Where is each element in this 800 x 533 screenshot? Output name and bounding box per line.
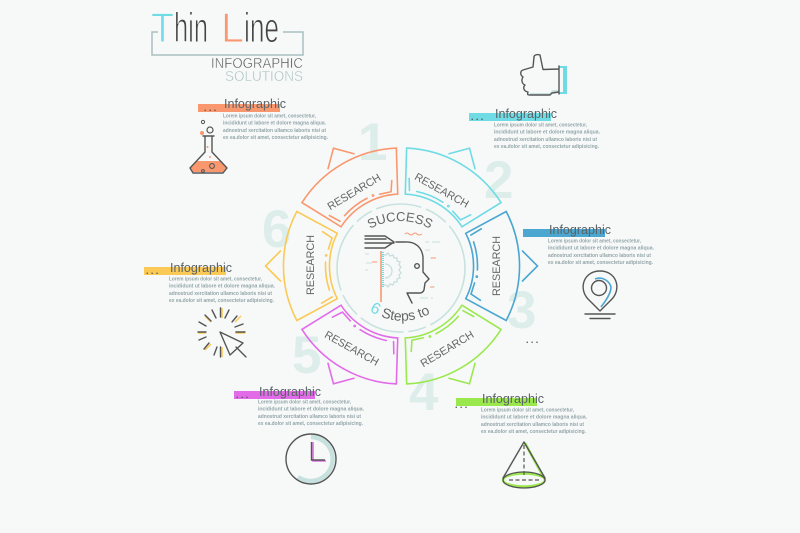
step numbers: 6 [262,200,291,259]
subtitle: Infographic Solutions: SOLUTIONS [225,68,303,85]
block 1: orange: ex ea.dolor sit amet, consectetur adipisicing. [223,135,329,141]
block 2: cyan: Infographic [495,107,557,121]
block 5: magenta: ... [236,390,251,400]
subtitle: Infographic Solutions [211,55,303,85]
block 6: yellow: ex ea.dolor sit amet, consectetur adipisicing. [169,298,275,304]
block 2: cyan: ... [471,112,486,122]
icon: map pin [583,271,617,318]
icon: flask [190,120,227,173]
title: Thin Line logo: hin [174,4,208,51]
block 6: yellow: ... [146,266,161,276]
block 6: yellow: Infographic [170,261,232,275]
block 4: green: adnostrud xercitation ullamco laboris nisi ut [481,422,584,428]
step numbers [262,113,536,422]
block 2: cyan: adnostrud xercitation ullamco laboris nisi ut [494,137,597,143]
segment 1: orange [286,121,417,238]
title: Thin Line logo: T [151,4,174,51]
block 4: green: ... [455,400,470,410]
segment 6: yellow [266,212,337,320]
block 2: cyan: incididunt ut labore et dolore magna aliqua. [494,130,601,136]
step numbers: 4 [409,363,439,422]
block 3: blue: adnostrud xercitation ullamco laboris nisi ut [548,253,651,259]
centre caption: 6 Steps to: 6 Steps to [371,302,429,324]
step numbers: 2 [484,151,513,210]
block 1: orange [198,97,329,141]
segment labels: RESEARCH: RESEARCH [419,329,476,370]
block 5: magenta: adnostrud xercitation ullamco laboris nisi ut [258,414,361,420]
block 2: cyan: ex ea.dolor sit amet, consectetur adipisicing. [494,144,600,150]
centre ring [337,204,465,332]
icon: cursor click [198,308,246,357]
block 4: green: ex ea.dolor sit amet, consectetur adipisicing. [481,429,587,435]
centre heading: SUCCESS [368,212,432,228]
block 2: cyan [469,107,601,150]
block 6: yellow: Lorem ipsum dolor sit amet, consectetur, [169,276,263,282]
block 3: blue: ... [526,335,541,345]
title: Thin Line logo: ine [244,4,279,51]
block 1: orange: Lorem ipsum dolor sit amet, consectetur, [223,114,317,120]
block 5: magenta: Lorem ipsum dolor sit amet, consectetur, [258,400,352,406]
segment labels: RESEARCH [305,171,503,370]
block 4: green: incididunt ut labore et dolore magna aliqua. [481,415,588,421]
step numbers: 3 [507,281,536,340]
block 6: yellow: incididunt ut labore et dolore magna aliqua. [169,284,276,290]
block 5: magenta: Infographic [259,385,321,399]
block 4: green [455,392,588,435]
icon: cone [503,442,545,488]
block 3: blue: Infographic [549,223,611,237]
segment 2: cyan [386,121,517,238]
block 4: green: Infographic [482,392,544,406]
block 6: yellow [144,261,276,304]
subtitle: Infographic Solutions: INFOGRAPHIC [211,55,303,72]
block 3: blue: Lorem ipsum dolor sit amet, consectetur, [548,238,642,244]
segment labels: RESEARCH: RESEARCH [305,235,317,295]
icon: head with pencil and gear [365,233,440,303]
step numbers: 1 [358,113,387,172]
block 5: magenta [234,385,365,427]
block 5: magenta: incididunt ut labore et dolore magna aliqua. [258,407,365,413]
title: Thin Line logo: L [221,4,244,51]
segment labels: RESEARCH: RESEARCH [412,171,471,211]
centre heading: SUCCESS: SUCCESS [368,212,432,228]
block 4: green: Lorem ipsum dolor sit amet, consectetur, [481,408,575,414]
block 3: blue [523,223,655,345]
segment 4: green [386,294,517,411]
block 2: cyan: Lorem ipsum dolor sit amet, consectetur, [494,122,588,128]
block 1: orange: Infographic [224,97,286,111]
segment 3: blue [466,212,538,320]
block 1: orange: adnostrud xercitation ullamco laboris nisi ut [223,128,326,134]
segment labels: RESEARCH: RESEARCH [326,172,383,213]
block 3: blue: ex ea.dolor sit amet, consectetur adipisicing. [548,260,654,266]
block 6: yellow: adnostrud xercitation ullamco laboris nisi ut [169,291,272,297]
title: Thin Line logo [151,4,303,55]
block 3: blue: incididunt ut labore et dolore magna aliqua. [548,246,655,252]
block 1: orange: incididunt ut labore et dolore magna aliqua. [223,121,327,127]
segment labels: RESEARCH: RESEARCH [322,329,381,369]
block 1: orange: ... [204,103,219,113]
icon: thumbs up [521,55,567,95]
block 5: magenta: ex ea.dolor sit amet, consectetur adipisicing. [258,421,364,427]
segment 5: magenta [286,294,417,411]
icon: clock [286,434,336,484]
segment labels: RESEARCH: RESEARCH [491,236,503,296]
step numbers: 5 [292,326,321,385]
